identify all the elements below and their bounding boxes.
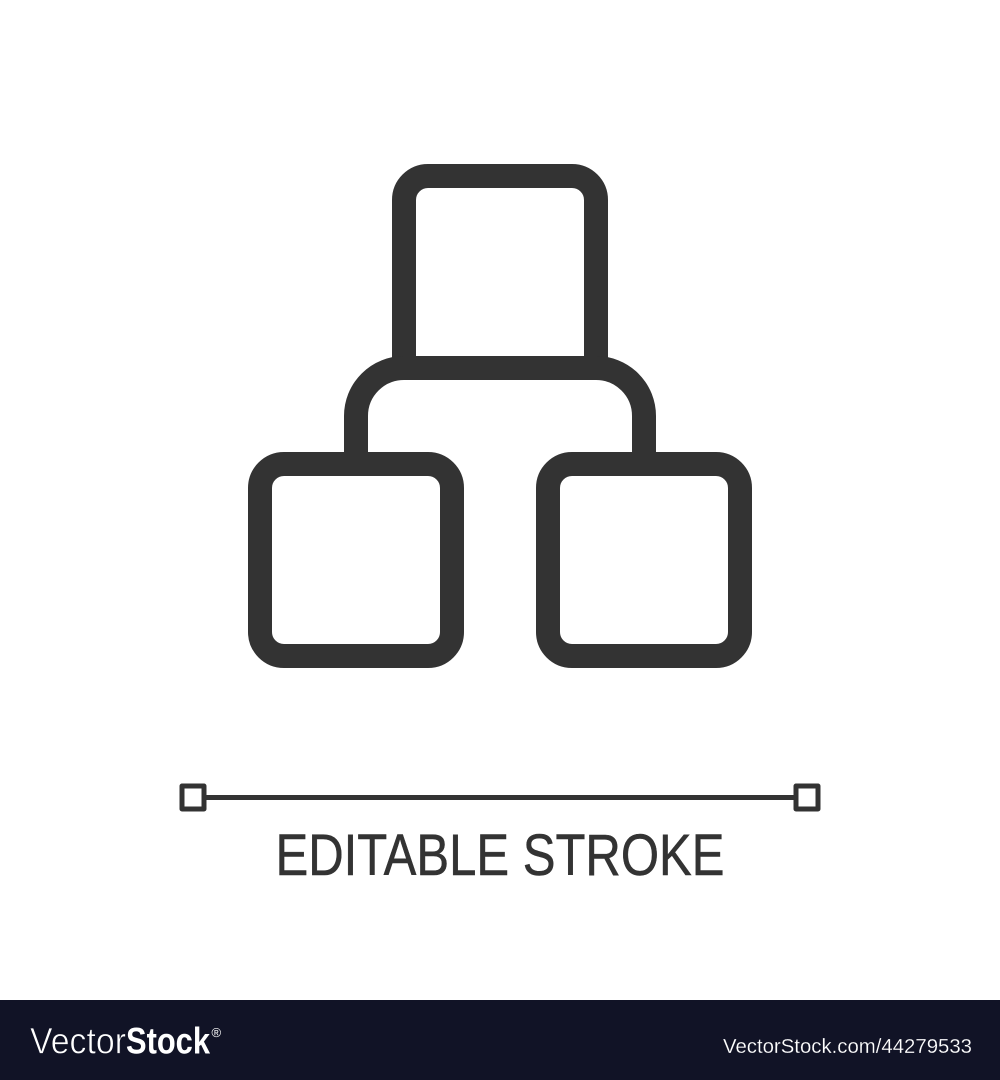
caption: editable stroke: EDITABLE STROKE [276,823,724,888]
footer bar [0,1000,1000,1080]
icon: top square, open into the connector [404,176,596,368]
footer logo: Vector: Vector [30,1020,126,1062]
line between handles [205,795,795,800]
footer logo: registered mark: ® [212,1025,222,1040]
icon: bottom right square [548,464,740,656]
right handle [796,786,818,809]
footer url: VectorStock.com/44279533 [723,1035,972,1058]
icon: connector bracket [356,368,644,464]
icon: hierarchy of three rounded squares [260,176,740,656]
footer logo: Stock: Stock [126,1020,210,1062]
left handle [182,786,204,809]
icon: bottom left square [260,464,452,656]
editable stroke indicator line [182,786,818,809]
